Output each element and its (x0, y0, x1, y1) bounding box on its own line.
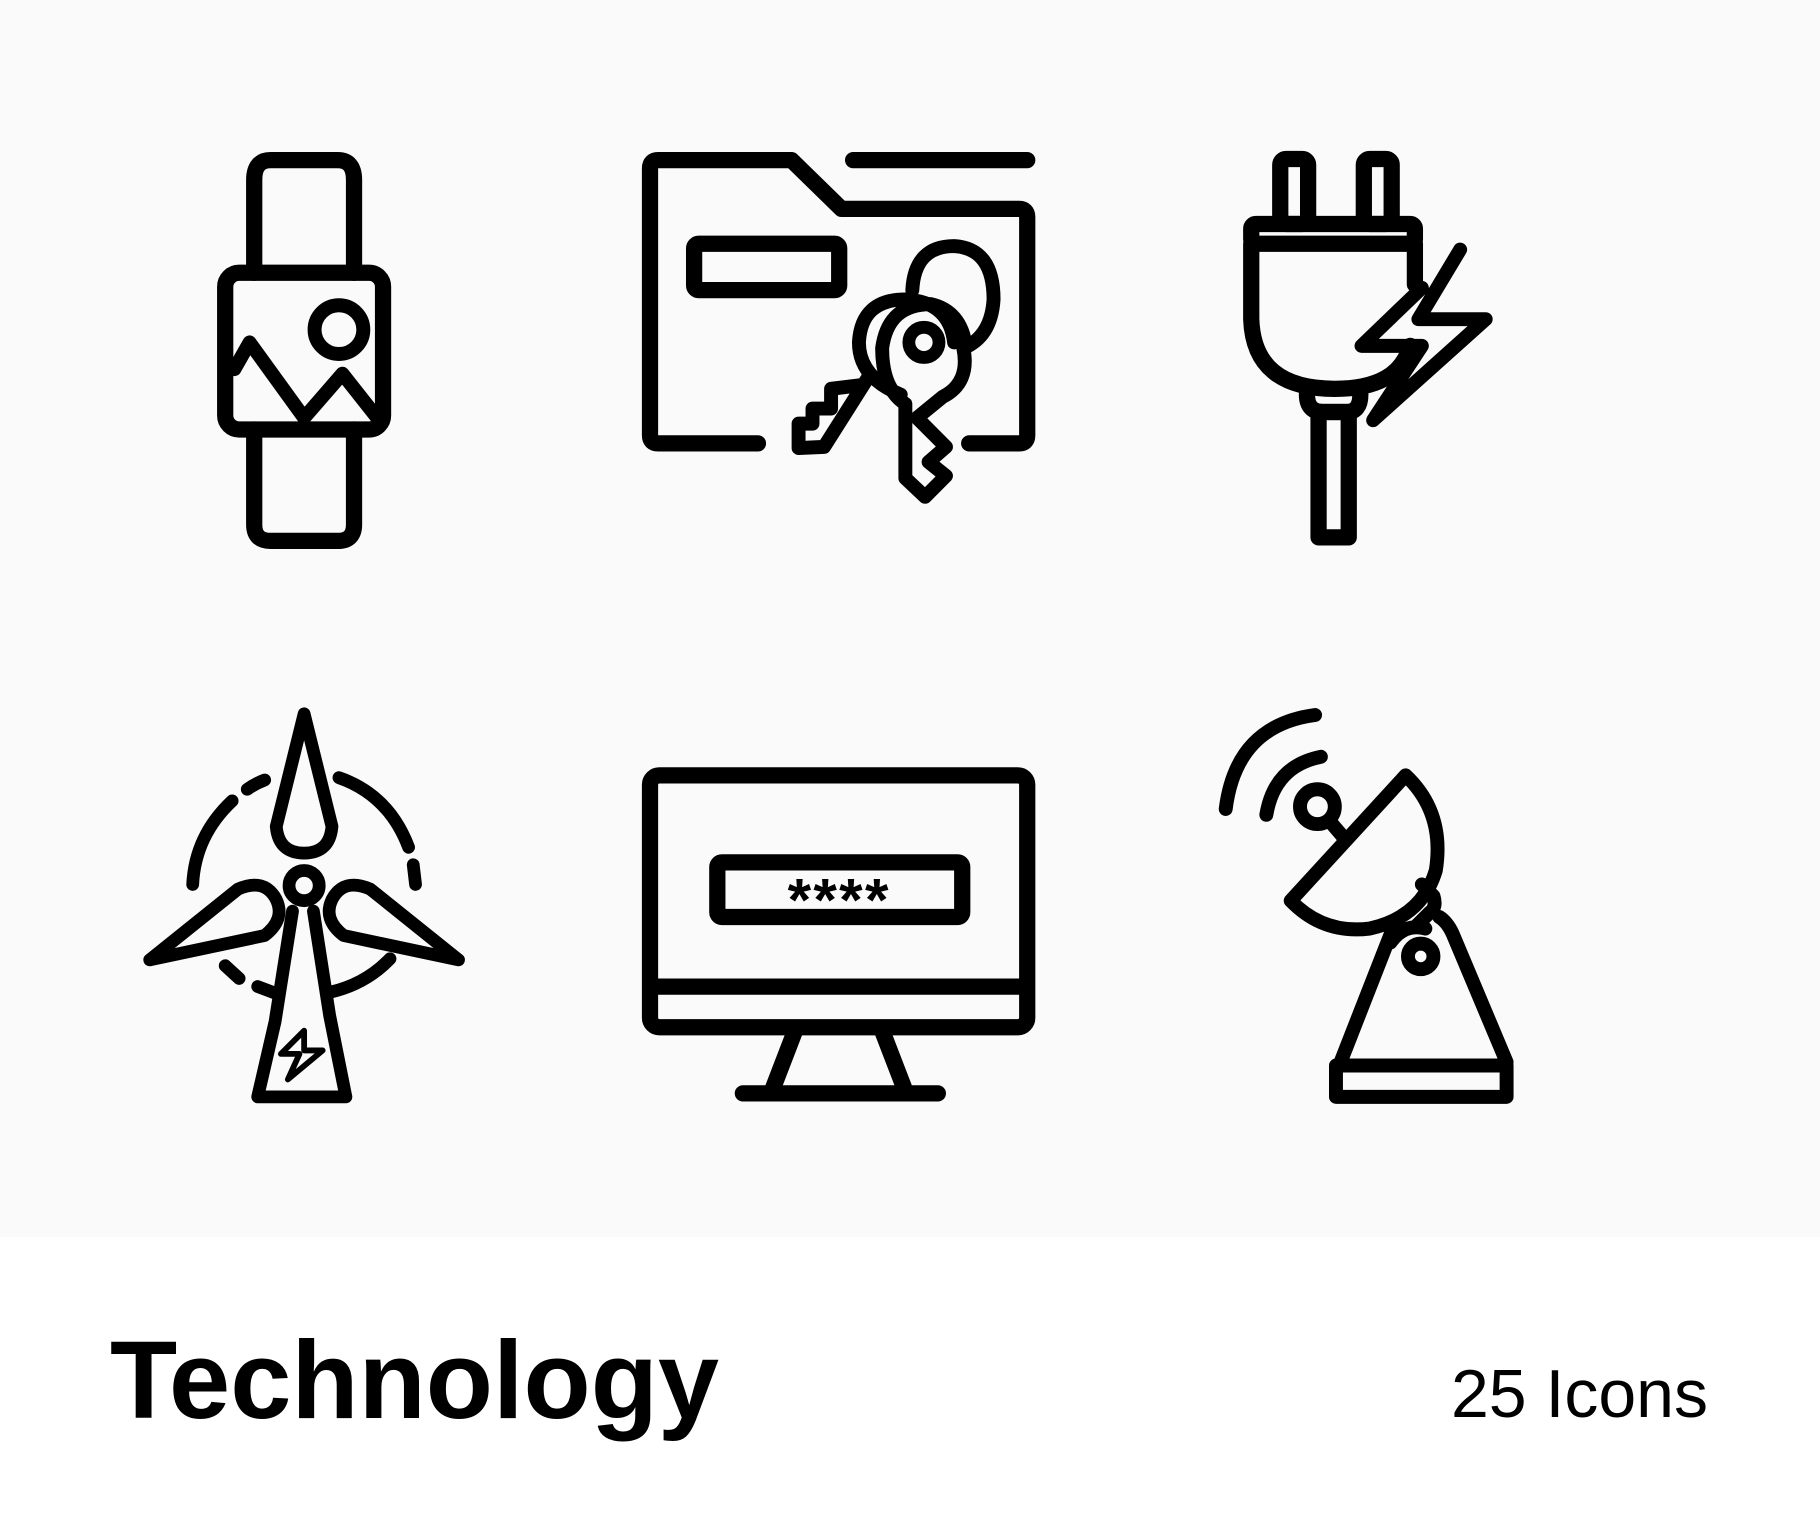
icon count: 25 Icons (1451, 1356, 1708, 1432)
title: Technology (110, 1319, 719, 1442)
icon: satellite dish (1226, 715, 1507, 1097)
icon: monitor with password (650, 775, 1027, 1093)
icon: folder with keys (650, 160, 1027, 497)
icon: plug with lightning (1251, 159, 1486, 537)
icon: wind turbine (150, 714, 458, 1097)
icon: smartwatch (225, 160, 383, 541)
icon: monitor with password: **** (788, 865, 891, 933)
